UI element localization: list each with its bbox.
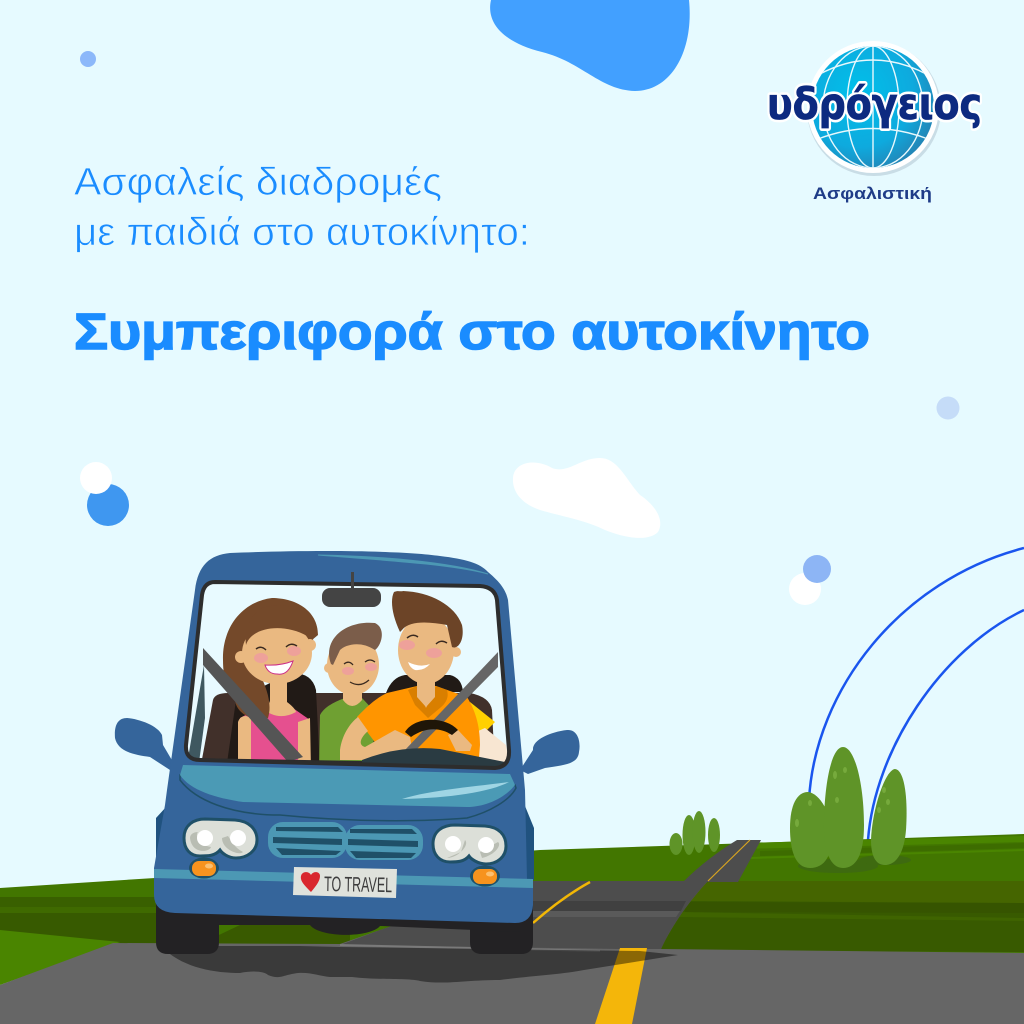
left tinted corner [189,666,205,758]
windscreen [186,582,510,772]
left headlight [184,819,257,858]
fog lights [189,858,500,886]
icon: heart [301,872,320,892]
side mirrors [115,718,580,774]
logo: Hydrogeios: υδρόγειος [767,79,982,130]
seat belts [203,648,498,762]
subtitle [74,161,530,254]
blue arcs [809,548,1024,840]
subtitle: με παιδιά στο αυτοκίνητο: [74,211,530,254]
logo: Hydrogeios: υδρόγειος [767,79,982,130]
hood [180,765,516,821]
bumper stripe [154,869,533,888]
white cloud [513,458,660,538]
small bushes [670,811,720,855]
car shadow [165,946,678,983]
decorative dot right [936,396,960,420]
side panels [156,806,534,880]
man [340,591,510,770]
grille [268,822,423,860]
roof highlight [318,555,488,574]
woman [223,598,320,770]
boy [319,623,382,770]
tires and underbody [156,900,533,954]
right headlight [433,825,506,864]
decorative blue blob top [490,0,690,91]
heading: Συμπεριφορά στο αυτοκίνητο [74,303,870,360]
logo: Hydrogeios [767,41,982,203]
decorative dot top left [80,51,96,67]
rear-view mirror [322,572,381,607]
licence plate: TO TRAVEL [324,873,392,897]
landscape: road [0,840,1024,1024]
dashboard [362,748,504,766]
large bushes [790,747,911,873]
family car [115,551,580,954]
logo: Hydrogeios: Ασφαλιστική [813,184,932,203]
steering wheel [405,720,458,737]
decorative circles left [80,462,129,526]
lower window edge [202,758,362,762]
decorative circles right [789,555,831,605]
rear seats [202,693,494,759]
landscape: grass [0,834,1024,985]
car body [154,551,533,923]
subtitle: Ασφαλείς διαδρομές [74,161,442,204]
licence plate [293,867,397,898]
